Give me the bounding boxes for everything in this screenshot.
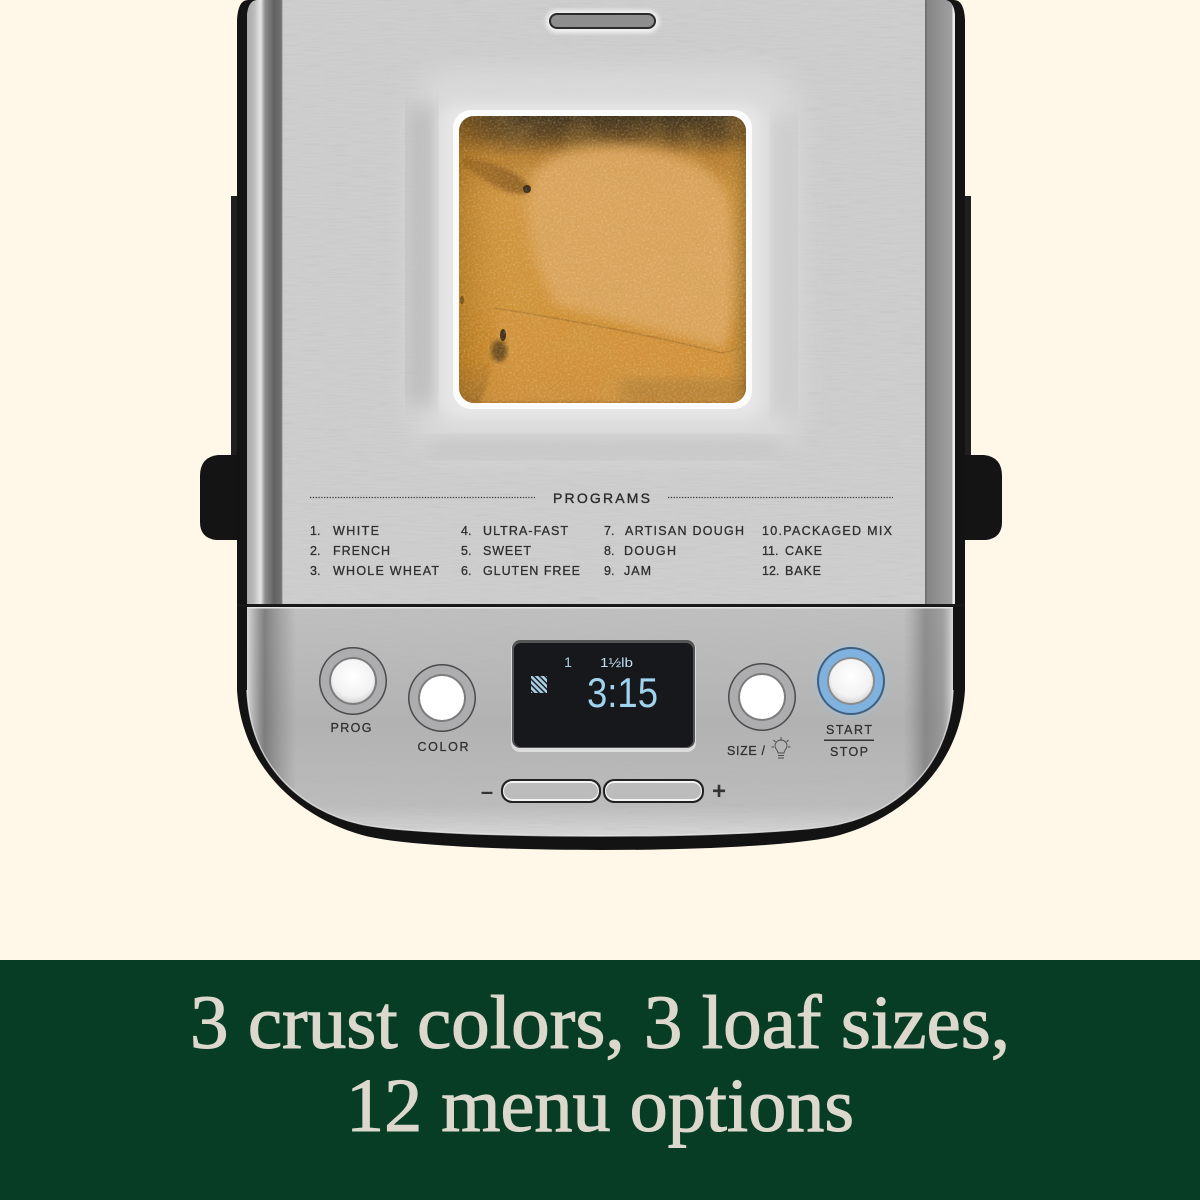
programs column 3: ARTISAN DOUGH xyxy=(625,524,744,538)
programs column 4: CAKE xyxy=(785,544,822,558)
lid panel xyxy=(247,0,955,605)
dark crust at upper left xyxy=(462,155,530,194)
programs column 2: SWEET xyxy=(483,544,531,558)
icon: light bulb xyxy=(772,737,790,758)
minus and plus buttons: + xyxy=(712,778,726,805)
left side clip xyxy=(200,196,239,540)
black body outline xyxy=(237,0,965,850)
window recess xyxy=(408,70,798,458)
COLOR button: COLOR xyxy=(418,740,468,754)
PROG button: PROG xyxy=(330,721,372,735)
COLOR button xyxy=(408,664,476,754)
programs column 4 xyxy=(762,524,893,578)
bread machine xyxy=(200,0,1002,850)
programs column 1: 3. xyxy=(310,564,320,578)
minus and plus buttons xyxy=(481,778,726,805)
programs column 2: GLUTEN FREE xyxy=(483,564,580,578)
dough lower fold xyxy=(480,324,746,403)
caption band xyxy=(0,960,1200,1200)
programs column 4: BAKE xyxy=(785,564,821,578)
programs column 2 xyxy=(461,524,580,578)
programs column 2: 4. xyxy=(461,524,471,538)
caption heading xyxy=(190,981,1010,1148)
dough highlight xyxy=(528,146,740,350)
control panel xyxy=(237,604,965,841)
LCD display: 1 xyxy=(564,654,572,670)
programs column 4: 10.PACKAGED MIX xyxy=(762,524,893,538)
right side clip xyxy=(963,196,1002,540)
programs column 4: 12. xyxy=(762,564,779,578)
START STOP button xyxy=(814,644,888,759)
SIZE button: SIZE / xyxy=(727,744,766,758)
programs column 3: 7. xyxy=(604,524,614,538)
programs column 3: DOUGH xyxy=(624,544,676,558)
START STOP button: START xyxy=(826,723,872,737)
programs column 1: 1. xyxy=(310,524,320,538)
programs heading: PROGRAMS xyxy=(553,490,650,506)
programs column 2: 6. xyxy=(461,564,471,578)
PROG button xyxy=(319,647,387,735)
programs column 1 xyxy=(310,524,439,578)
programs column 1: WHOLE WHEAT xyxy=(333,564,439,578)
background xyxy=(0,0,1200,960)
viewing window with dough xyxy=(459,116,746,403)
programs column 3: JAM xyxy=(624,564,651,578)
LCD display: 1½lb xyxy=(600,655,633,670)
programs column 1: FRENCH xyxy=(333,544,390,558)
caption heading: 3 crust colors, 3 loaf sizes, xyxy=(190,981,1010,1065)
programs column 4: 11. xyxy=(762,544,778,558)
caption heading: 12 menu options xyxy=(346,1064,854,1148)
programs column 1: WHITE xyxy=(333,524,379,538)
icon: crust shade xyxy=(531,676,547,693)
programs column 1: 2. xyxy=(310,544,320,558)
programs column 2: ULTRA-FAST xyxy=(483,524,568,538)
programs column 2: 5. xyxy=(461,544,471,558)
left lid edge xyxy=(247,0,283,605)
minus and plus buttons: – xyxy=(481,779,493,804)
SIZE button xyxy=(727,663,796,758)
LCD display: 3:15 xyxy=(587,669,658,716)
programs column 3 xyxy=(604,524,744,578)
dark spots at lower left xyxy=(460,296,746,403)
programs list xyxy=(310,490,893,578)
right lid edge xyxy=(925,0,955,605)
LCD display xyxy=(511,640,696,752)
lid handle xyxy=(546,10,659,33)
START STOP button: STOP xyxy=(830,745,868,759)
programs column 3: 8. xyxy=(604,544,614,558)
programs column 3: 9. xyxy=(604,564,614,578)
